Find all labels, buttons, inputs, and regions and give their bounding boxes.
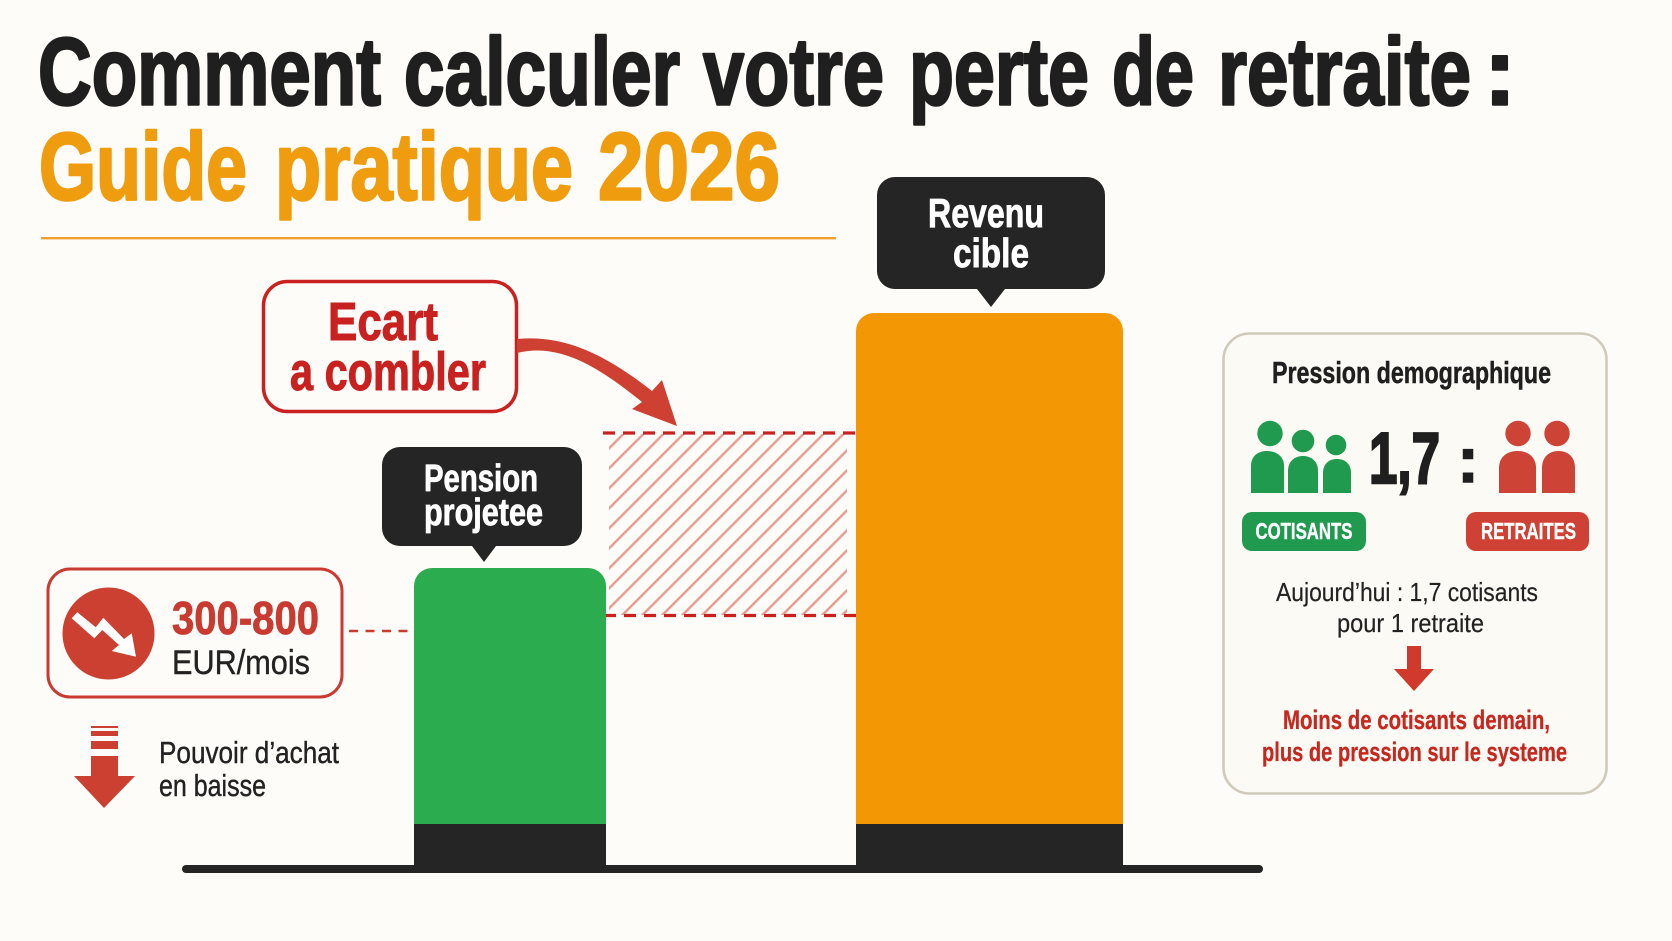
label: Pension projetee: Pension — [424, 458, 538, 500]
ratio: 1,7 — [1369, 419, 1440, 499]
title: : — [1484, 18, 1516, 126]
gap callout: Ecart a combler — [264, 282, 516, 412]
label: Pension projetee — [382, 447, 582, 562]
label: Revenu cible — [877, 177, 1105, 307]
bar: target income — [856, 313, 1123, 873]
warning text — [1262, 705, 1567, 767]
badge: retraites: RETRAITES — [1481, 518, 1576, 544]
subtitle: Guide — [39, 114, 247, 220]
label: Revenu cible: Revenu — [928, 190, 1044, 236]
icon: contributors — [1251, 421, 1351, 493]
title: calculer — [404, 18, 680, 126]
arrow: consequence — [1394, 646, 1434, 691]
panel heading: Pression demographique — [1272, 355, 1551, 390]
label: Pension projetee: projetee — [424, 492, 543, 534]
explanation text: Aujourd’hui : 1,7 cotisants — [1276, 577, 1538, 607]
explanation text — [1276, 577, 1538, 638]
title: Comment — [38, 18, 381, 126]
badge: retraites — [1466, 512, 1589, 551]
badge: cotisants: COTISANTS — [1256, 518, 1352, 544]
loss amount: 300-800 — [172, 592, 319, 644]
purchasing power text — [159, 735, 339, 803]
icon: retirees — [1499, 421, 1575, 493]
subtitle — [39, 114, 780, 220]
title: votre — [703, 18, 884, 126]
purchasing power text: en baisse — [159, 768, 266, 803]
explanation text: pour 1 retraite — [1337, 608, 1484, 638]
axis baseline — [182, 865, 1263, 873]
panel: demographic pressure: : — [1457, 424, 1479, 496]
gap callout: Ecart a combler: a combler — [290, 342, 486, 402]
label: Revenu cible: cible — [953, 230, 1029, 276]
warning text: plus de pression sur le systeme — [1262, 737, 1567, 767]
icon: falling arrow in circle — [62, 588, 154, 680]
arrow: callout to gap — [517, 338, 677, 426]
icon: down arrow — [74, 726, 135, 808]
gap callout: Ecart a combler: Ecart — [328, 292, 438, 352]
bar: projected pension — [414, 568, 606, 873]
subtitle: pratique — [275, 114, 573, 220]
purchasing power text: Pouvoir d’achat — [159, 735, 339, 770]
panel: demographic pressure — [1224, 334, 1606, 794]
unit: EUR/mois — [172, 644, 310, 682]
title: perte — [909, 18, 1089, 126]
badge: cotisants — [1242, 512, 1366, 551]
subtitle: 2026 — [598, 114, 780, 220]
gap hatched area — [603, 433, 856, 616]
warning text: Moins de cotisants demain, — [1283, 705, 1550, 735]
stat box: monthly loss — [48, 569, 342, 697]
title: de — [1112, 18, 1194, 126]
title — [38, 18, 1516, 126]
title: retraite — [1218, 18, 1471, 126]
